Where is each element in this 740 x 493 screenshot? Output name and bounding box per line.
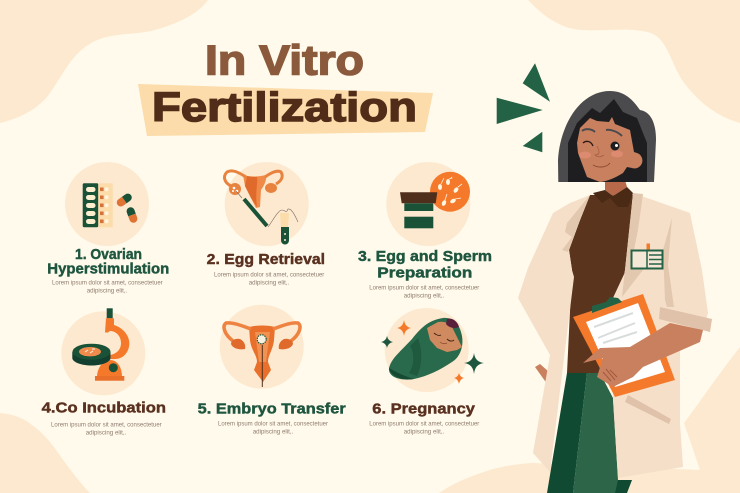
description 3 (369, 284, 479, 300)
step 3: egg and sperm preparation (358, 162, 492, 300)
lab coat (518, 193, 712, 478)
description 4 (51, 422, 162, 436)
icon: container and sperm dish (400, 172, 470, 228)
description 4: adipiscing elit,. (86, 430, 127, 436)
sleeve cuff (659, 307, 712, 332)
face (577, 117, 642, 182)
description 2 (214, 272, 324, 286)
coat pocket (625, 395, 671, 424)
step 6: pregnancy (369, 308, 484, 436)
heading 6: 6. Pregnancy (372, 400, 476, 417)
heading 5: 5. Embryo Transfer (198, 400, 346, 417)
description 3: Lorem ipsum dolor sit amet, consectetuer (369, 284, 479, 292)
neck (605, 173, 627, 196)
icon circle 4 (61, 311, 145, 395)
heading 2: 2. Egg Retrieval (207, 251, 325, 268)
icon: uterus with embryo (224, 323, 300, 387)
description 6: adipiscing elit,. (404, 428, 445, 436)
trousers (547, 373, 632, 493)
description 3: adipiscing elit,. (404, 292, 445, 300)
heading 1: Hyperstimulation (47, 260, 169, 277)
heading 1 (47, 246, 169, 277)
step 2: egg retrieval (207, 162, 325, 286)
description 6: Lorem ipsum dolor sit amet, consectetuer (369, 420, 479, 428)
step 4: co incubation (42, 308, 166, 436)
hair (558, 91, 656, 182)
step 5: embryo transfer (198, 305, 346, 436)
clipboard (573, 294, 675, 397)
icon: blister pack and capsules (83, 183, 138, 227)
description 1 (52, 280, 163, 294)
icon circle 5 (220, 305, 304, 389)
doctor illustration (518, 91, 712, 493)
heading 3 (358, 248, 492, 282)
description 1: adipiscing elit,. (87, 288, 128, 294)
icon: uterus with needle and test tube (224, 171, 298, 244)
title banner (138, 84, 433, 136)
title: In Vitro: In Vitro (205, 36, 364, 84)
heading 4: 4.Co Incubation (42, 399, 166, 416)
title: Fertilization: Fertilization (152, 84, 417, 130)
description 6 (369, 420, 479, 436)
icon circle 3 (386, 162, 470, 246)
description 5 (218, 420, 328, 436)
step 1: ovarian hyperstimulation (47, 162, 169, 294)
icon circle 2 (225, 162, 309, 246)
icon: green attention triangles (497, 63, 550, 152)
heading 3: Preparation (377, 264, 472, 282)
arm and hand (583, 323, 703, 387)
heading 3: 3. Egg and Sperm (358, 248, 492, 265)
description 5: adipiscing elit,. (253, 428, 294, 436)
description 2: adipiscing elit,. (249, 280, 290, 286)
shirt (567, 195, 633, 373)
icon circle 6 (385, 308, 469, 392)
heading 1: 1. Ovarian (75, 246, 142, 263)
left hand (535, 364, 549, 384)
description 4: Lorem ipsum dolor sit amet, consectetuer (51, 422, 162, 428)
description 1: Lorem ipsum dolor sit amet, consectetuer (52, 280, 163, 286)
icon: swaddled baby and sparkles (381, 318, 484, 384)
description 2: Lorem ipsum dolor sit amet, consectetuer (214, 272, 324, 278)
shirt collar (593, 187, 633, 207)
badge (632, 244, 662, 268)
icon circle 1 (65, 162, 149, 246)
description 5: Lorem ipsum dolor sit amet, consectetuer (218, 420, 328, 428)
icon: microscope (72, 308, 129, 381)
